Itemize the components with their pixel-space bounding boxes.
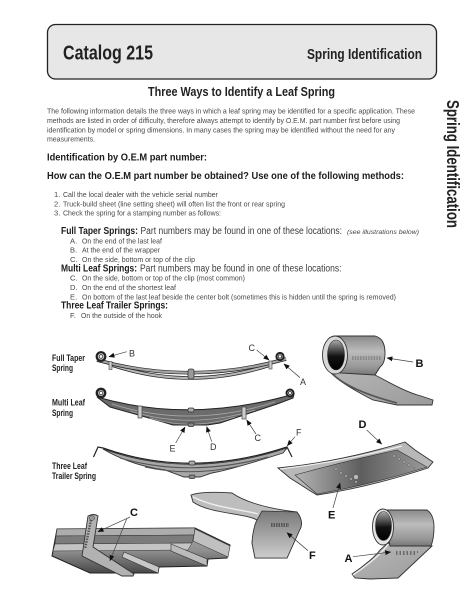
label: multi leaf spring: Multi Leaf xyxy=(52,398,86,408)
three leaf trailer locations: F. xyxy=(70,311,76,320)
full taper locations: Part numbers may be found in one of these locations: xyxy=(140,226,342,237)
full taper locations: At the end of the wrapper xyxy=(82,246,160,255)
small callouts on the spring diagrams: B xyxy=(129,348,135,358)
numbered methods: Truck-build sheet (line setting sheet) will often list the front or rear spring xyxy=(63,200,285,208)
callout D: D xyxy=(358,419,366,431)
intro paragraph xyxy=(47,106,415,144)
side tab heading: Spring Identification xyxy=(443,100,463,228)
diagram: full taper spring xyxy=(97,352,286,379)
three leaf trailer locations: On the outside of the hook xyxy=(81,311,162,320)
small callouts on the spring diagrams: F xyxy=(296,428,302,438)
full taper locations: B. xyxy=(70,246,77,255)
subheading: how to obtain: How can the O.E.M part number be obtained? Use one of the following methods: xyxy=(47,170,404,182)
full taper locations: C. xyxy=(70,255,78,264)
small callouts on the spring diagrams: A xyxy=(300,377,306,387)
detail: wrapper end with stamping A xyxy=(352,509,434,579)
three leaf trailer locations: Three Leaf Trailer Springs: xyxy=(61,301,168,312)
detail: leaf end with locations D and E xyxy=(278,442,433,495)
intro paragraph: identification by model or spring dimensions. In many cases the spring may be identified without the need for any xyxy=(47,126,395,134)
label: full taper spring: Spring xyxy=(52,363,73,373)
callout B xyxy=(387,358,424,370)
multi leaf locations: Part numbers may be found in one of these locations: xyxy=(140,263,342,274)
multi leaf locations: E. xyxy=(70,292,77,301)
full taper locations: On the side, bottom or top of the clip xyxy=(82,255,195,264)
numbered methods: Call the local dealer with the vehicle serial number xyxy=(63,190,218,199)
full taper locations: On the end of the last leaf xyxy=(82,236,163,246)
callout E xyxy=(328,483,340,522)
small callouts on the spring diagrams: C xyxy=(254,433,262,443)
label: full taper spring: Full Taper xyxy=(52,353,85,363)
diagram: three leaf trailer spring xyxy=(94,447,292,478)
callout A xyxy=(344,552,391,565)
callout B: B xyxy=(416,358,424,370)
catalog title: Catalog 215 xyxy=(63,42,153,64)
three leaf trailer locations xyxy=(61,301,168,320)
callout F xyxy=(287,533,316,562)
callout D xyxy=(358,419,382,444)
callout A: A xyxy=(344,553,352,565)
intro paragraph: measurements. xyxy=(47,134,95,144)
callout E: E xyxy=(328,510,335,522)
callout F: F xyxy=(309,550,316,562)
header panel xyxy=(48,24,436,79)
multi leaf locations: On the side, bottom or top of the clip (most common) xyxy=(82,274,245,283)
small callouts on the spring diagrams xyxy=(109,343,306,454)
intro paragraph: methods are listed in order of difficulty, therefore always attempt to identify by O.E.M. part number first before using xyxy=(47,116,400,125)
numbered methods xyxy=(54,190,285,218)
numbered methods: 2. xyxy=(54,200,60,208)
label: three leaf trailer spring: Three Leaf xyxy=(52,461,88,471)
label: three leaf trailer spring: Trailer Spring xyxy=(52,471,96,481)
multi leaf locations: D. xyxy=(70,283,78,292)
full taper locations xyxy=(61,226,419,264)
small callouts on the spring diagrams: E xyxy=(170,444,176,454)
diagram: multi leaf spring xyxy=(97,389,294,426)
full taper locations: Full Taper Springs: xyxy=(61,226,138,237)
callout C: C xyxy=(130,507,138,519)
detail: clip with stamping C xyxy=(52,514,230,576)
multi leaf locations: C. xyxy=(70,274,78,283)
numbered methods: 1. xyxy=(54,190,60,199)
detail: hook end with stamping F xyxy=(191,492,302,558)
section name: Spring Identification xyxy=(307,47,422,63)
numbered methods: 3. xyxy=(54,209,60,218)
label: multi leaf spring: Spring xyxy=(52,408,73,418)
multi leaf locations: On the end of the shortest leaf xyxy=(82,283,177,292)
multi leaf locations: On bottom of the last leaf beside the center bolt (sometimes this is hidden until the spring is removed) xyxy=(82,292,396,301)
full taper locations: A. xyxy=(70,236,77,246)
detail: wrapper end with stamping B xyxy=(322,336,433,405)
small callouts on the spring diagrams: C xyxy=(248,343,256,353)
subheading: OEM: Identification by O.E.M part number: xyxy=(47,152,207,164)
intro paragraph: The following information details the three ways in which a leaf spring may be identified for a specific application. These xyxy=(47,106,415,116)
callout C xyxy=(98,507,138,561)
main heading: Three Ways to Identify a Leaf Spring xyxy=(148,85,335,99)
multi leaf locations xyxy=(61,263,396,301)
numbered methods: Check the spring for a stamping number as follows: xyxy=(63,209,221,218)
label: three leaf trailer spring xyxy=(52,461,96,481)
label: full taper spring xyxy=(52,353,85,373)
label: multi leaf spring xyxy=(52,398,86,418)
multi leaf locations: Multi Leaf Springs: xyxy=(61,263,137,274)
small callouts on the spring diagrams: D xyxy=(210,442,217,452)
full taper locations: (see illustrations below) xyxy=(347,229,419,236)
